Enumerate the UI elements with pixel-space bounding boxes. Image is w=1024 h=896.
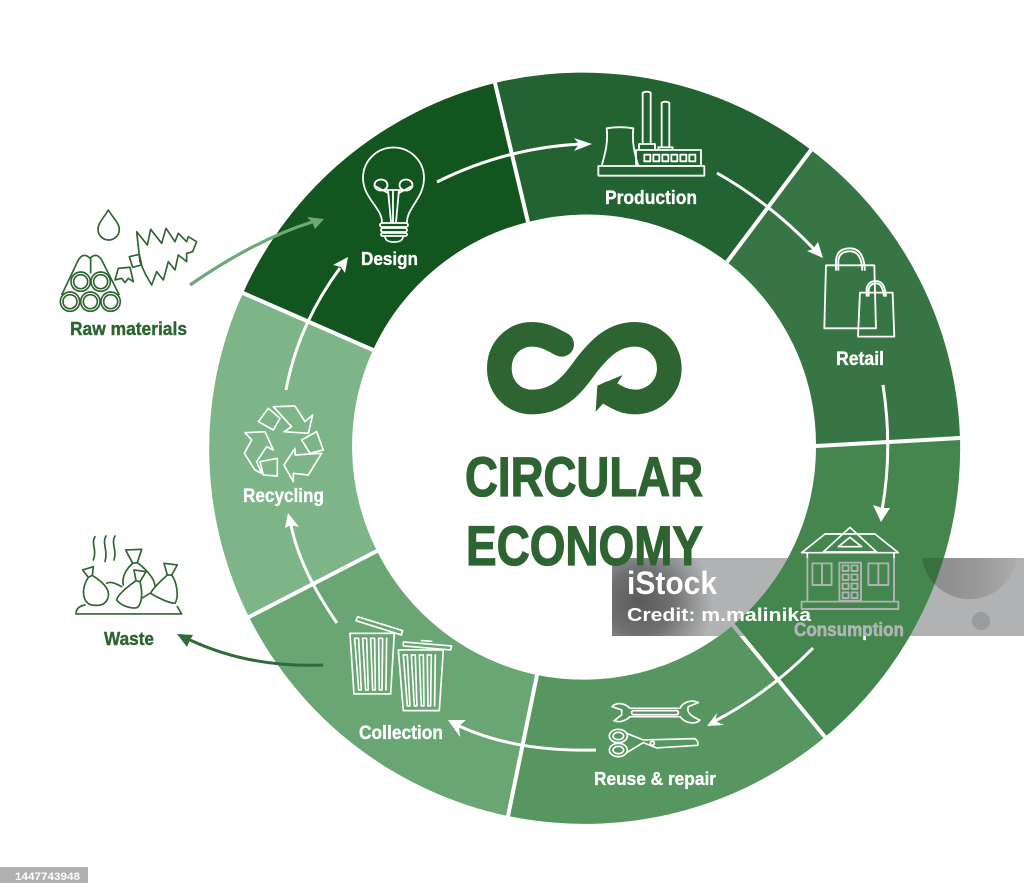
arrow: collection to recycling — [285, 513, 337, 623]
icon: house — [802, 527, 898, 609]
segment: recycling — [209, 293, 377, 617]
arrow: raw materials to design — [190, 217, 324, 285]
arrow: reuse and repair to collection — [448, 720, 596, 750]
icon: factory — [598, 92, 704, 176]
segment: design — [243, 83, 528, 350]
icon: shopping bags — [824, 248, 894, 337]
label: design: Design — [361, 249, 418, 269]
icon: raw materials — [60, 210, 197, 311]
center logo: infinity loop with arrow — [499, 334, 669, 413]
arrow: design to production — [437, 138, 592, 182]
icon: waste bags — [76, 536, 182, 614]
label: production: Production — [605, 188, 697, 209]
label: raw materials: Raw materials — [70, 318, 187, 339]
title: ECONOMY — [466, 514, 703, 577]
watermark credit text — [627, 565, 812, 625]
label: retail: Retail — [836, 349, 884, 370]
arrow: production to retail — [717, 173, 823, 258]
watermark credit text: Credit: m.malinika — [627, 605, 812, 625]
segment: consumption — [733, 438, 960, 737]
label: recycling: Recycling — [243, 486, 324, 507]
title — [465, 445, 703, 577]
segment: collection — [249, 551, 537, 816]
icon: light bulb — [363, 147, 424, 242]
segment: production — [495, 73, 811, 262]
label: waste: Waste — [104, 628, 154, 649]
label: consumption: Consumption — [794, 620, 904, 641]
watermark band — [612, 558, 1024, 636]
icon: wrench and scissors — [609, 701, 700, 757]
label: reuse and repair: Reuse & repair — [594, 768, 716, 789]
title: CIRCULAR — [465, 445, 703, 508]
stock image id tag: 1447743948 — [15, 871, 80, 883]
arrow: recycling to design — [286, 257, 348, 390]
icon: recycling symbol — [244, 406, 323, 482]
segment: reuse and repair — [508, 625, 825, 824]
arrow: retail to consumption — [873, 385, 890, 522]
watermark credit text: iStock — [627, 565, 717, 601]
arrow: collection to waste — [177, 634, 323, 665]
icon: trash bins — [350, 617, 452, 711]
arrow: consumption to reuse and repair — [707, 648, 813, 726]
segment: retail — [727, 150, 960, 446]
watermark circle shade — [922, 558, 1017, 599]
label: collection: Collection — [359, 723, 443, 744]
stock image id tag — [0, 867, 88, 883]
circular ring of seven stages — [209, 73, 960, 824]
